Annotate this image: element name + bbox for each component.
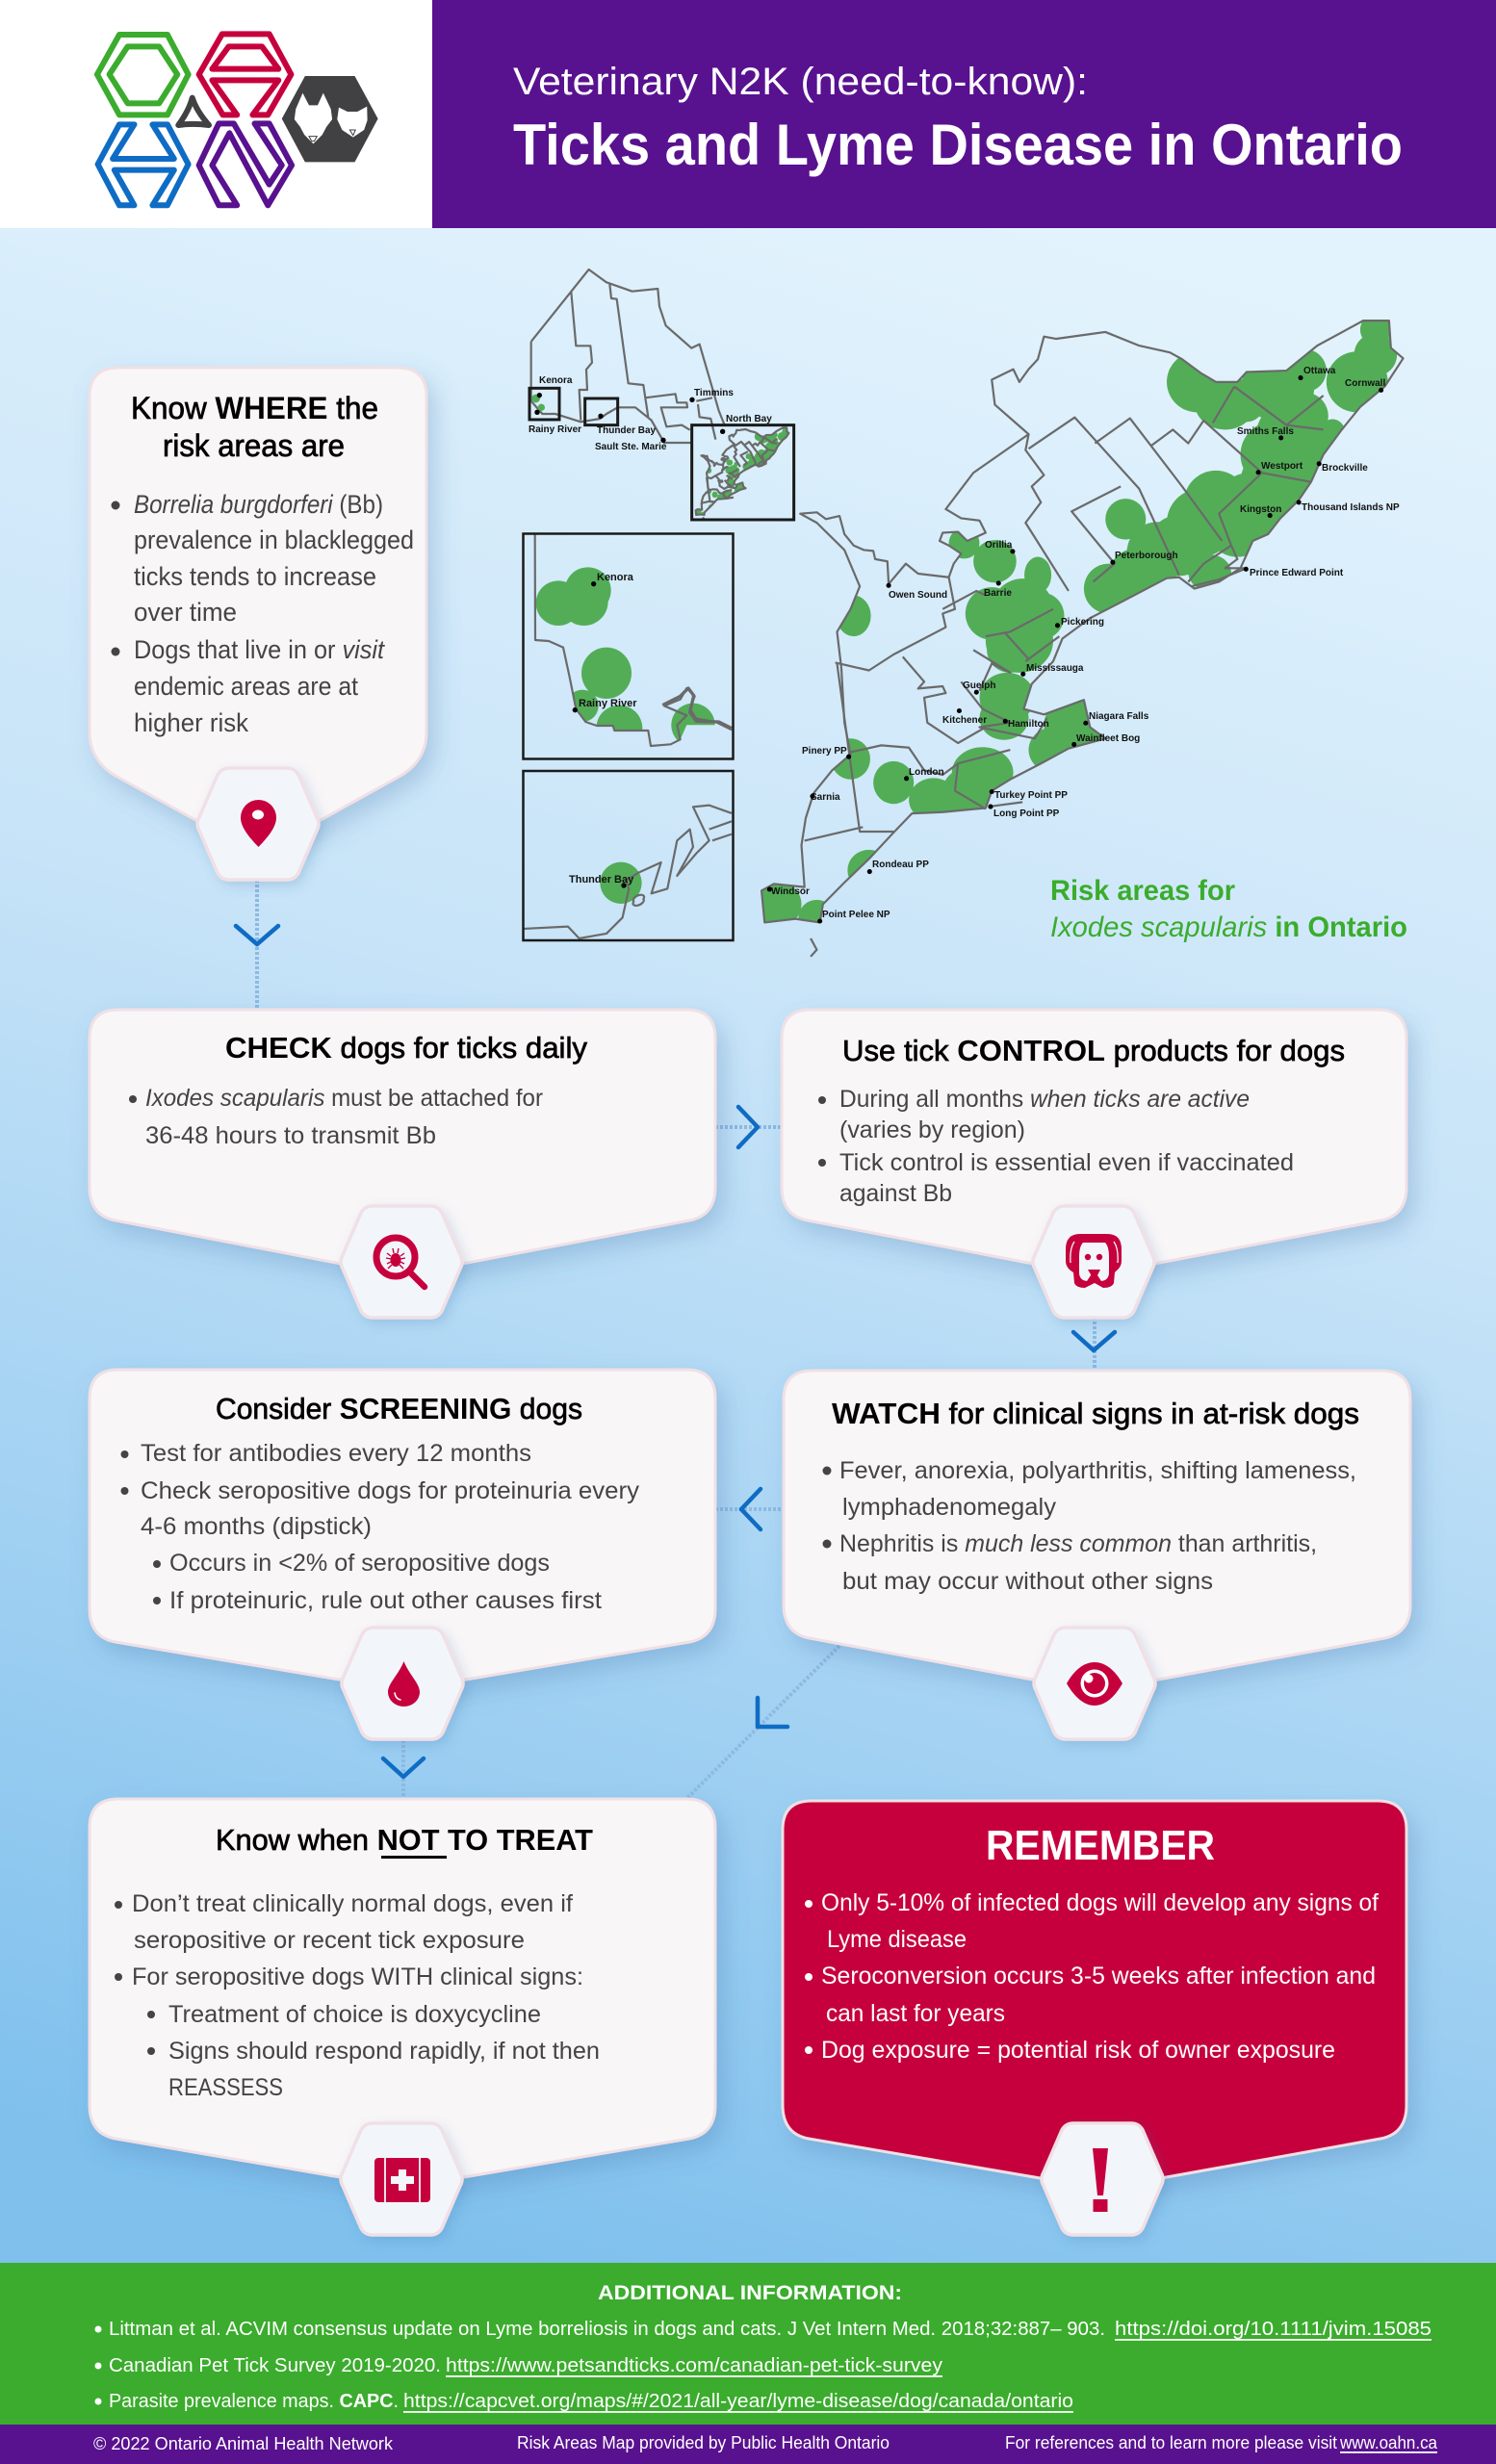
inset: Kenora and Rainy River: Rainy River — [579, 698, 637, 709]
icon: exclamation mark — [1042, 2123, 1163, 2235]
reference 2 — [94, 2355, 942, 2377]
text: watch bullets: but may occur without other signs — [842, 1568, 1213, 1595]
text: not to treat bullets: REASSESS — [168, 2074, 283, 2101]
text: control bullets: During all months when ticks are active — [839, 1086, 1250, 1113]
panel: control — [782, 1010, 1406, 1318]
city labels — [771, 366, 1400, 920]
overview labels: Kenora — [539, 375, 573, 386]
risk map — [524, 270, 1407, 957]
icon: dog head — [1033, 1206, 1154, 1318]
icon: first aid kit — [341, 2123, 462, 2235]
text: remember bullets: Only 5-10% of infected dogs will develop any signs of — [821, 1889, 1379, 1916]
reference 3: Parasite prevalence maps. CAPC. — [109, 2391, 399, 2412]
text: control bullets: against Bb — [839, 1180, 952, 1207]
reference 3: https://capcvet.org/maps/#/2021/all-year/lyme-disease/dog/canada/ontario — [403, 2391, 1073, 2412]
overview labels: North Bay — [726, 414, 772, 424]
city dots — [767, 375, 1383, 924]
heading: watch: WATCH for clinical signs in at-risk dogs — [832, 1397, 1359, 1430]
panel: watch — [784, 1371, 1410, 1739]
text: remember bullets — [805, 1889, 1379, 2064]
text: watch bullets: Nephritis is much less common than arthritis, — [839, 1530, 1317, 1557]
text: remember bullets: Dog exposure = potential risk of owner exposure — [821, 2037, 1335, 2064]
heading: remember: REMEMBER — [986, 1822, 1215, 1869]
city labels: Westport — [1261, 461, 1303, 472]
city labels: Ottawa — [1303, 366, 1336, 376]
text: not to treat bullets: For seropositive dogs WITH clinical signs: — [132, 1964, 583, 1990]
city labels: Cornwall — [1345, 378, 1385, 389]
city labels: Rondeau PP — [872, 860, 929, 870]
text: not to treat bullets — [115, 1890, 600, 2101]
text: remember bullets: Seroconversion occurs 3-5 weeks after infection and — [821, 1963, 1376, 1989]
panel: know where — [90, 368, 426, 880]
arrow: control to watch — [1073, 1317, 1115, 1371]
heading: where — [131, 391, 378, 463]
reference 2: Canadian Pet Tick Survey 2019-2020. — [109, 2355, 441, 2376]
icon: blood drop — [342, 1628, 463, 1739]
heading: where: risk areas are — [163, 428, 345, 463]
city labels: Smiths Falls — [1237, 426, 1294, 437]
text: check bullets — [129, 1085, 543, 1149]
text: not to treat bullets: Treatment of choice is doxycycline — [168, 2001, 541, 2028]
footer: credits bar: © 2022 Ontario Animal Health Network — [93, 2434, 394, 2453]
text: screening bullets — [121, 1440, 640, 1614]
map caption — [1050, 875, 1407, 943]
heading: control: Use tick CONTROL products for dogs — [842, 1034, 1345, 1067]
arrow: screening to not treat — [383, 1740, 424, 1799]
text: where bullets: prevalence in blacklegged — [134, 526, 414, 554]
icon: magnifier with tick — [341, 1206, 462, 1318]
city labels: Thousand Islands NP — [1302, 502, 1400, 513]
footer: additional information — [0, 2263, 1496, 2425]
arrow: where to check — [236, 880, 278, 1010]
city labels: Turkey Point PP — [994, 790, 1068, 801]
footer: credits bar — [0, 2425, 1496, 2464]
text: screening bullets: If proteinuric, rule out other causes first — [169, 1587, 602, 1614]
city labels: Brockville — [1322, 463, 1368, 474]
city labels: London — [909, 767, 944, 778]
panel: remember — [783, 1801, 1406, 2235]
footer heading: ADDITIONAL INFORMATION: — [598, 2282, 902, 2304]
city labels: Mississauga — [1026, 663, 1084, 674]
city labels: Hamilton — [1008, 719, 1049, 730]
city labels: Orillia — [985, 540, 1013, 551]
text: where bullets: endemic areas are at — [134, 672, 358, 701]
icon: map pin — [197, 768, 319, 880]
city labels: Windsor — [771, 886, 810, 897]
logo — [97, 34, 378, 205]
city labels: Peterborough — [1115, 551, 1178, 561]
text: remember bullets: can last for years — [826, 2000, 1005, 2027]
text: where bullets: Dogs that live in or visit — [134, 635, 385, 664]
header line 1: Veterinary N2K (need-to-know): — [513, 61, 1088, 103]
text: where bullets: higher risk — [134, 708, 248, 737]
city labels: Kitchener — [942, 715, 987, 726]
header line 2: Ticks and Lyme Disease in Ontario — [513, 113, 1403, 177]
text: control bullets: (varies by region) — [839, 1116, 1025, 1143]
city labels: Barrie — [984, 588, 1012, 599]
arrow: check to control — [715, 1107, 782, 1147]
panel: screening — [90, 1370, 715, 1739]
panel: check — [90, 1010, 715, 1318]
text: control bullets — [818, 1086, 1294, 1207]
text: watch bullets — [822, 1457, 1356, 1595]
arrow: watch to not treat diagonal — [687, 1646, 839, 1798]
mini south map — [695, 426, 788, 520]
inset: Thunder Bay — [524, 771, 734, 940]
main southern Ontario map — [756, 314, 1404, 957]
inset: Thunder Bay: Thunder Bay — [569, 874, 634, 886]
inset: Kenora and Rainy River — [524, 533, 734, 758]
reference 2: https://www.petsandticks.com/canadian-pet-tick-survey — [446, 2355, 942, 2376]
overview labels: Sault Ste. Marie — [595, 442, 667, 452]
text: not to treat bullets: seropositive or recent tick exposure — [134, 1927, 525, 1954]
footer: credits bar: For references and to learn more please visit — [1005, 2433, 1337, 2452]
text: check bullets: 36-48 hours to transmit Bb — [145, 1122, 436, 1149]
text: screening bullets: Occurs in <2% of seropositive dogs — [169, 1550, 550, 1577]
text: not to treat bullets: Don’t treat clinically normal dogs, even if — [132, 1890, 573, 1917]
heading: where: Know WHERE the — [131, 391, 378, 425]
text: check bullets: Ixodes scapularis must be attached for — [145, 1085, 543, 1112]
city labels: Prince Edward Point — [1250, 568, 1344, 578]
reference 1: https://doi.org/10.1111/jvim.15085 — [1115, 2319, 1432, 2340]
text: watch bullets: lymphadenomegaly — [842, 1494, 1057, 1521]
city labels: Kingston — [1240, 504, 1281, 515]
text: where bullets: ticks tends to increase — [134, 562, 376, 591]
text: watch bullets: Fever, anorexia, polyarthritis, shifting lameness, — [839, 1457, 1356, 1484]
overview labels: Rainy River — [529, 424, 581, 435]
city labels: Sarnia — [811, 792, 840, 803]
text: remember bullets: Lyme disease — [827, 1926, 967, 1953]
city labels: Long Point PP — [993, 808, 1060, 819]
overview labels — [529, 375, 772, 452]
arrow: watch to screening — [715, 1489, 785, 1529]
heading: screening: Consider SCREENING dogs — [216, 1392, 582, 1425]
overview labels: Timmins — [694, 388, 734, 398]
icon: eye — [1034, 1628, 1155, 1739]
text: where bullets: Borrelia burgdorferi (Bb) — [134, 490, 383, 519]
city labels: Guelph — [963, 680, 995, 691]
reference 1: Littman et al. ACVIM consensus update on Lyme borreliosis in dogs and cats. J Vet Intern Med. 2018;32:887– 903. — [109, 2319, 1105, 2340]
text: where bullets: over time — [134, 598, 237, 627]
heading: not to treat: Know when NOT TO TREAT — [216, 1823, 593, 1857]
footer: credits bar: Risk Areas Map provided by Public Health Ontario — [517, 2433, 890, 2452]
text: screening bullets: 4-6 months (dipstick) — [141, 1513, 372, 1540]
reference 3 — [94, 2391, 1073, 2413]
heading: check: CHECK dogs for ticks daily — [225, 1031, 587, 1065]
city labels: Pinery PP — [802, 746, 847, 757]
city labels: Owen Sound — [889, 590, 947, 601]
footer: credits bar: www.oahn.ca — [1339, 2433, 1438, 2452]
text: screening bullets: Check seropositive dogs for proteinuria every — [141, 1477, 640, 1504]
overview of province — [529, 270, 794, 520]
panel: not to treat — [90, 1799, 715, 2235]
overview labels: Thunder Bay — [597, 425, 657, 436]
inset: Kenora and Rainy River: Kenora — [597, 572, 634, 583]
text: not to treat bullets: Signs should respond rapidly, if not then — [168, 2038, 600, 2065]
text: screening bullets: Test for antibodies every 12 months — [141, 1440, 531, 1467]
city labels: Wainfleet Bog — [1076, 733, 1140, 744]
header — [0, 0, 1496, 228]
city labels: Point Pelee NP — [822, 910, 890, 920]
city labels: Niagara Falls — [1089, 711, 1149, 722]
city labels: Pickering — [1061, 617, 1104, 628]
text: where bullets — [112, 490, 414, 737]
map caption: Ixodes scapularis in Ontario — [1050, 911, 1407, 943]
text: control bullets: Tick control is essential even if vaccinated — [839, 1149, 1294, 1176]
map caption: Risk areas for — [1050, 875, 1235, 907]
